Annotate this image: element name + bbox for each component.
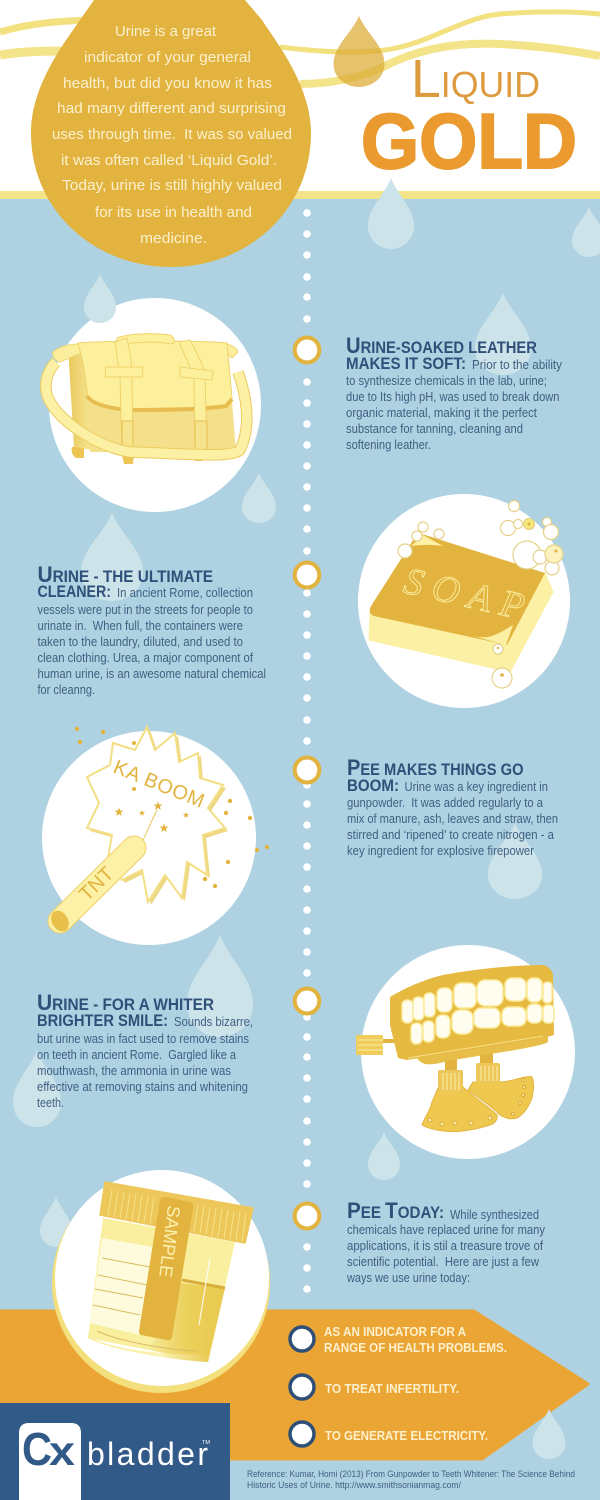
section: smile text: effective at removing stains and whitening bbox=[37, 1080, 248, 1094]
section: pee today text: While synthesized bbox=[450, 1208, 539, 1222]
section: boom text: BOOM: bbox=[347, 777, 399, 795]
section: cleaner text: vessels were put in the streets for people to bbox=[38, 603, 253, 617]
reference bbox=[247, 1469, 575, 1491]
section: smile text: mouthwash, the ammonia in urine was bbox=[37, 1064, 231, 1078]
section: leather text: MAKES IT SOFT: bbox=[346, 355, 466, 373]
icon: wind-up teeth bbox=[356, 965, 554, 1132]
section: leather text: organic material, making it the perfect bbox=[346, 406, 537, 420]
section: pee today text: applications, it is stil a treasure trove of bbox=[347, 1239, 543, 1253]
section: smile text: Sounds bizarre, bbox=[174, 1015, 253, 1029]
water drop background 11 bbox=[40, 1197, 72, 1247]
section: pee today text: chemicals have replaced urine for many bbox=[347, 1223, 546, 1237]
section: smile text: teeth. bbox=[37, 1096, 64, 1110]
gold intro drop bbox=[31, 0, 311, 267]
title bbox=[361, 49, 577, 185]
section: leather text: substance for tanning, cleaning and bbox=[346, 422, 523, 436]
logo block: TM bbox=[202, 1440, 210, 1446]
intro text: Today, urine is still highly valued bbox=[62, 177, 282, 194]
section: cleaner text: URINE - THE ULTIMATE bbox=[38, 562, 213, 587]
logo block: x bbox=[49, 1428, 75, 1474]
water drop background 3 bbox=[84, 274, 116, 323]
title: GOLD bbox=[361, 97, 577, 185]
right foot bbox=[468, 1077, 534, 1119]
section: boom text: Urine was a key ingredient in bbox=[404, 780, 548, 794]
intro text: Urine is a great bbox=[115, 23, 217, 40]
timeline dots bbox=[303, 209, 311, 1293]
section: pee today text bbox=[346, 1198, 546, 1285]
soap lettering: SOAP bbox=[400, 560, 528, 628]
intro text: uses through time. It was so valued bbox=[52, 126, 292, 143]
section: pee today text: PEE TODAY: bbox=[347, 1198, 444, 1223]
section: boom text: PEE MAKES THINGS GO bbox=[347, 755, 524, 780]
icon: TNT explosion bbox=[48, 727, 269, 935]
bullet text bbox=[324, 1324, 507, 1443]
reference: Historic Uses of Urine. http://www.smithsonianmag.com/ bbox=[247, 1480, 461, 1491]
section: cleaner text: CLEANER: bbox=[38, 583, 111, 601]
water drop background 6 bbox=[81, 513, 143, 601]
bullet ring 2 bbox=[290, 1375, 314, 1399]
section: smile text: BRIGHTER SMILE: bbox=[37, 1012, 168, 1030]
section: leather text: to synthesize chemicals in the lab, urine; bbox=[346, 374, 547, 388]
intro text: for its use in health and bbox=[95, 204, 252, 221]
section: leather text: URINE-SOAKED LEATHER bbox=[346, 333, 537, 358]
tnt text: TNT bbox=[75, 863, 118, 906]
intro text: medicine. bbox=[140, 230, 207, 247]
section: leather text: due to Its high pH, was used to break down bbox=[346, 390, 560, 404]
timeline ring 5 bbox=[295, 1204, 319, 1228]
ka boom text: KA BOOM bbox=[110, 756, 207, 813]
timeline ring 3 bbox=[295, 758, 319, 782]
timeline ring 4 bbox=[295, 988, 319, 1014]
intro text: it was often called ‘Liquid Gold’. bbox=[61, 152, 277, 169]
sample label text: SAMPLE bbox=[155, 1205, 184, 1278]
logo block bbox=[0, 1403, 230, 1500]
water drop background 5 bbox=[242, 473, 276, 523]
logo block: C bbox=[22, 1423, 52, 1475]
section: smile text bbox=[37, 990, 253, 1110]
water drop background 10 bbox=[368, 1132, 400, 1180]
teeth circle bbox=[361, 945, 575, 1159]
section: cleaner text: In ancient Rome, collection bbox=[117, 586, 253, 600]
bullet list bbox=[290, 1324, 507, 1446]
logo block: bladder bbox=[87, 1436, 208, 1472]
section: leather text bbox=[346, 333, 563, 452]
sample circle bbox=[52, 1170, 270, 1393]
section: cleaner text bbox=[38, 562, 266, 697]
section: boom text: gunpowder. It was added regularly to a bbox=[347, 796, 543, 810]
section: boom text: key ingredient for explosive firepower bbox=[347, 844, 534, 858]
boom circle bbox=[42, 731, 256, 945]
bullet text: AS AN INDICATOR FOR A bbox=[324, 1324, 467, 1339]
section: boom text bbox=[347, 755, 558, 858]
section: leather text: softening leather. bbox=[346, 438, 431, 452]
water drop background 7 bbox=[488, 823, 542, 899]
translucent gold drop bbox=[334, 16, 384, 87]
intro text: indicator of your general bbox=[84, 49, 251, 66]
water drop background 9 bbox=[13, 1050, 61, 1127]
water drop background 1 bbox=[368, 178, 414, 249]
bullet text: RANGE OF HEALTH PROBLEMS. bbox=[324, 1340, 507, 1355]
section: cleaner text: clean clothing. Urea, a major component of bbox=[38, 651, 253, 665]
section: boom text: stirred and ‘ripened’ to create nitrogen - a bbox=[347, 828, 554, 842]
section: smile text: but urine was in fact used to remove stains bbox=[37, 1032, 249, 1046]
bullet ring 3 bbox=[290, 1422, 314, 1446]
section: cleaner text: taken to the laundry, diluted, and used to bbox=[38, 635, 243, 649]
icon: soap bar bbox=[369, 500, 563, 688]
title: LIQUID bbox=[411, 49, 540, 109]
bullet text: TO GENERATE ELECTRICITY. bbox=[325, 1428, 488, 1443]
bullet ring 1 bbox=[290, 1327, 314, 1351]
section: cleaner text: human urine, is an awesome natural chemical bbox=[38, 667, 266, 681]
icon: leather bag bbox=[46, 334, 247, 464]
section: smile text: URINE - FOR A WHITER bbox=[37, 990, 214, 1015]
timeline ring 1 bbox=[295, 338, 319, 362]
intro text: had many different and surprising bbox=[57, 100, 286, 117]
section: cleaner text: for cleanng. bbox=[38, 683, 95, 697]
section: leather text: Prior to the ability bbox=[472, 358, 563, 372]
water drop background 8 bbox=[187, 935, 253, 1037]
soap circle bbox=[358, 494, 570, 708]
intro text: health, but did you know it has bbox=[63, 75, 272, 92]
bullet text: TO TREAT INFERTILITY. bbox=[325, 1381, 459, 1396]
water drop background 12 bbox=[532, 1409, 566, 1459]
icon: sample cup bbox=[88, 1182, 253, 1362]
bag circle bbox=[49, 298, 261, 512]
timeline ring 2 bbox=[295, 562, 319, 588]
section: cleaner text: urinate in. When full, the containers were bbox=[38, 619, 243, 633]
water drop background 2 bbox=[572, 207, 600, 257]
section: smile text: on teeth in ancient Rome. Gargled like a bbox=[37, 1048, 236, 1062]
intro text bbox=[52, 23, 292, 247]
section: boom text: mix of manure, ash, leaves and straw, then bbox=[347, 812, 558, 826]
section: pee today text: ways we use urine today: bbox=[346, 1271, 470, 1285]
water drop background 4 bbox=[475, 293, 531, 375]
orange arrow banner bbox=[0, 1311, 588, 1459]
left foot bbox=[422, 1087, 497, 1132]
section: pee today text: scientific potential. Here are just a few bbox=[347, 1255, 540, 1269]
